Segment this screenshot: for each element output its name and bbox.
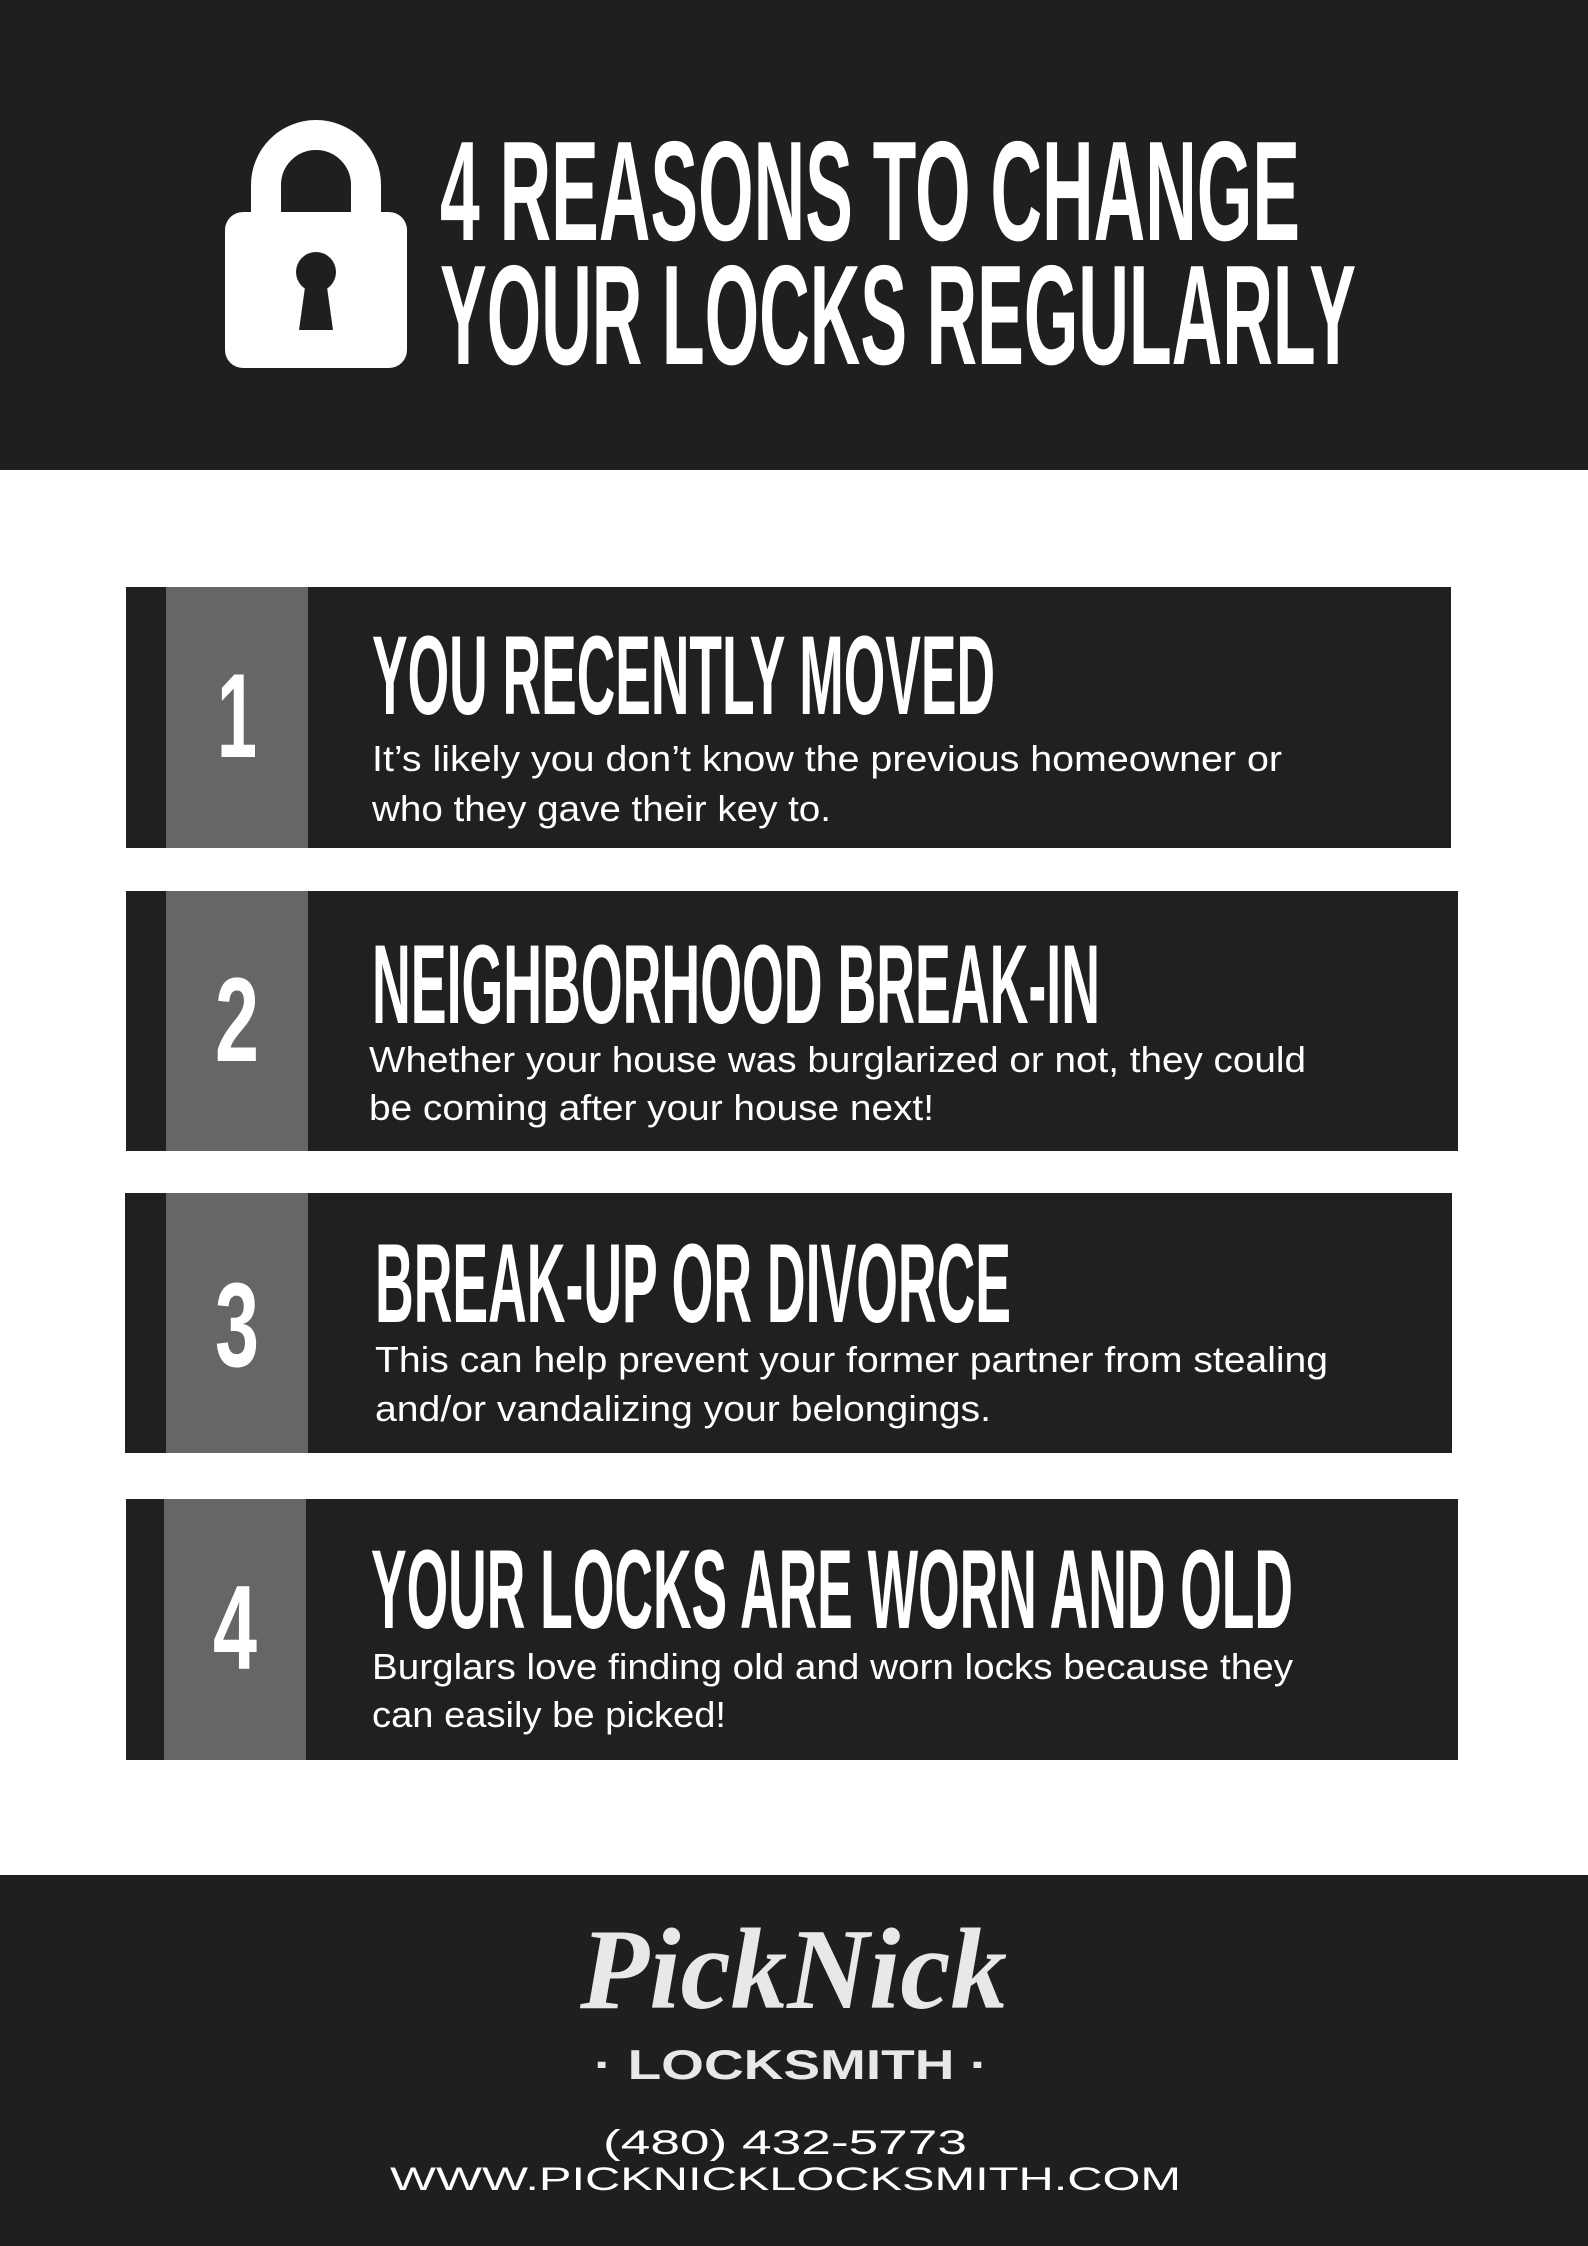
body 1: who they gave their key to. [371, 788, 831, 829]
body 3: This can help prevent your former partner from stealing [375, 1339, 1328, 1380]
number 4: 4 [213, 1561, 257, 1695]
number 2: 2 [215, 953, 259, 1087]
website: WWW.PICKNICKLOCKSMITH.COM [390, 2161, 1181, 2197]
number 1: 1 [217, 649, 257, 783]
header band [0, 0, 1588, 470]
body 1 [371, 738, 1282, 829]
logo: PickNick: PickNick [579, 1906, 1007, 2033]
phone: (480) 432-5773 [603, 2124, 967, 2162]
panel: reason 4 [126, 1499, 1458, 1760]
body 2: be coming after your house next! [369, 1087, 934, 1128]
panel: reason 2 [126, 891, 1458, 1151]
title [440, 112, 1356, 395]
footer band [0, 1875, 1588, 2246]
panel: reason 3 [125, 1193, 1452, 1453]
body 2: Whether your house was burglarized or not, they could [369, 1039, 1306, 1080]
body 1: It’s likely you don’t know the previous homeowner or [372, 738, 1282, 779]
panel: reason 1 [126, 587, 1451, 848]
body 4 [372, 1646, 1293, 1735]
body 4: can easily be picked! [372, 1694, 726, 1735]
icon: padlock [225, 135, 407, 368]
body 3: and/or vandalizing your belongings. [375, 1388, 991, 1429]
body 2 [369, 1039, 1306, 1128]
body 3 [375, 1339, 1328, 1429]
logo: locksmith: · LOCKSMITH · [594, 2041, 988, 2088]
number 3: 3 [215, 1258, 259, 1392]
body 4: Burglars love finding old and worn locks because they [372, 1646, 1293, 1687]
